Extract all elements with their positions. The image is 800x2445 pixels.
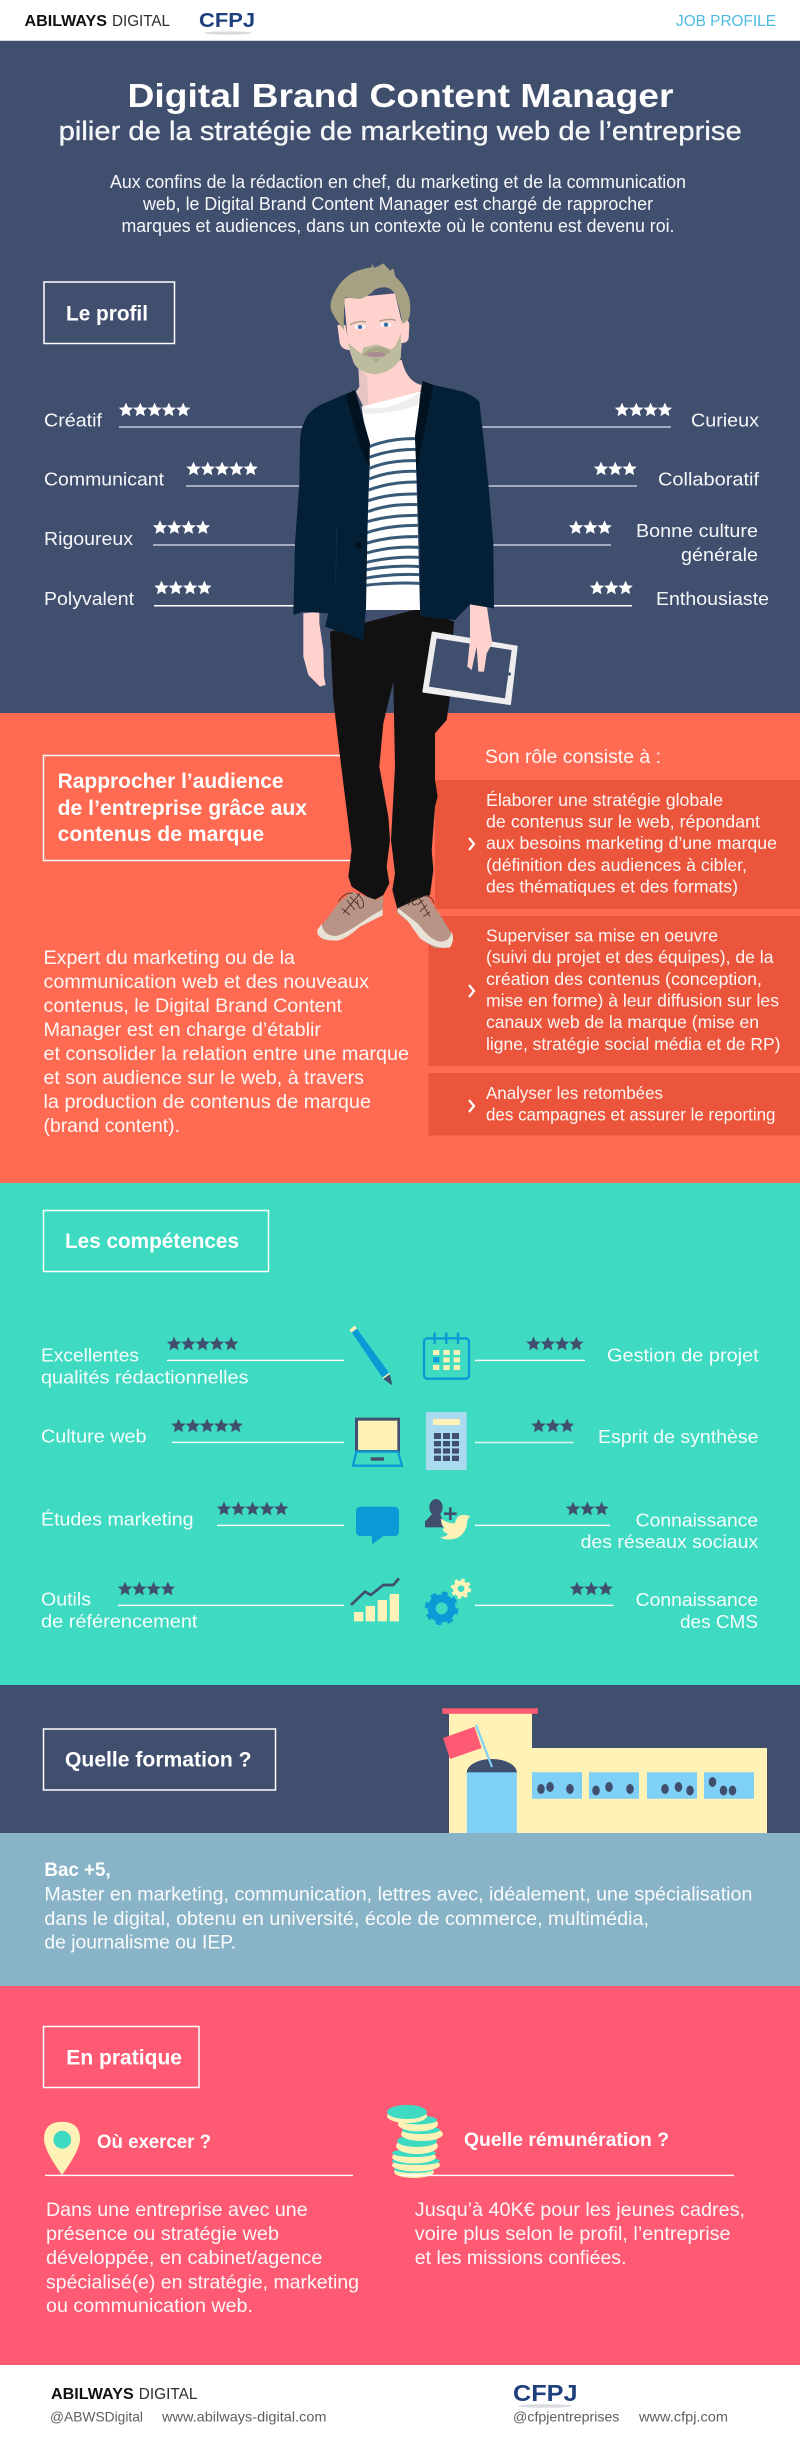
box: élaborer: Élaborer une stratégie globale <box>486 790 723 810</box>
footer: Abilways Digital: www.abilways-digital.com <box>161 2409 326 2425</box>
rating: rigoureux <box>44 520 297 549</box>
text block: où exercer: ou communication web. <box>46 2296 253 2317</box>
text block: rémunération: voire plus selon le profil, l’entreprise <box>415 2224 731 2245</box>
heading: son rôle: Son rôle consiste à : <box>485 747 661 768</box>
tablet <box>423 633 517 704</box>
skill: cms: des CMS <box>680 1611 758 1632</box>
panel: en pratique <box>0 1986 800 2365</box>
skill: esprit de synthèse: Esprit de synthèse <box>598 1426 758 1447</box>
text block: expert: Manager est en charge d’établir <box>44 1020 322 1041</box>
skill: cms: Connaissance <box>636 1589 758 1610</box>
text block: expert: et son audience sur le web, à travers <box>44 1068 364 1089</box>
box: analyser: Analyser les retombées <box>486 1083 663 1103</box>
heading: le profil: Le profil <box>66 302 148 326</box>
logo: Abilways Digital <box>24 13 170 30</box>
box: superviser: canaux web de la marque (mise en <box>486 1012 759 1032</box>
intro text: marques et audiences, dans un contexte où le contenu est devenu roi. <box>122 215 674 236</box>
box: analyser: des campagnes et assurer le reporting <box>486 1105 776 1125</box>
hands <box>303 603 492 687</box>
logo: CFPJ: CFPJ <box>199 10 255 32</box>
rating: curieux: Curieux <box>691 410 760 431</box>
rating: créatif: Créatif <box>44 410 103 431</box>
rating: créatif <box>44 403 304 431</box>
footer <box>0 2365 800 2445</box>
text block: où exercer: spécialisé(e) en stratégie, marketing <box>46 2272 359 2293</box>
skill: réseaux sociaux <box>475 1502 759 1552</box>
footer: CFPJ: www.cfpj.com <box>638 2409 728 2425</box>
text block: rémunération <box>415 2200 745 2269</box>
heading: les compétences: Les compétences <box>65 1230 239 1253</box>
icon: pencil <box>349 1326 392 1385</box>
heading: en pratique: En pratique <box>66 2046 182 2069</box>
skill: qualités rédactionnelles: Excellentes <box>41 1345 139 1366</box>
head <box>331 263 410 374</box>
illustration: school building <box>442 1708 767 1833</box>
heading: rapprocher l'audience: de l’entreprise grâce aux <box>58 797 307 820</box>
footer: CFPJ <box>513 2380 728 2425</box>
text block: expert <box>44 948 409 1137</box>
rating: bonne culture générale: Bonne culture <box>636 520 758 541</box>
skill: esprit de synthèse <box>475 1419 758 1447</box>
icon: laptop <box>353 1418 402 1466</box>
rating: collaboratif <box>486 462 760 490</box>
text block: expert: la production de contenus de marque <box>44 1092 371 1113</box>
rating: polyvalent <box>44 581 296 609</box>
skill: outils de référencement <box>41 1582 344 1632</box>
icon: trend chart <box>351 1578 399 1621</box>
box: superviser: Superviser sa mise en oeuvre <box>486 926 718 946</box>
rating: curieux <box>480 403 760 431</box>
panel: quelle formation <box>0 1685 800 1833</box>
box: élaborer: aux besoins marketing d’une marque <box>486 833 777 853</box>
rating: enthousiaste <box>492 581 769 609</box>
box: élaborer: de contenus sur le web, répondant <box>486 812 760 832</box>
skill: qualités rédactionnelles: qualités rédactionnelles <box>41 1367 248 1388</box>
text block: expert: contenus, le Digital Brand Content <box>44 996 343 1017</box>
rating: rigoureux: Rigoureux <box>44 528 134 549</box>
text block: expert: communication web et des nouveaux <box>44 972 370 993</box>
heading: quelle formation <box>44 1729 276 1790</box>
rating: communicant <box>44 462 302 490</box>
footer: Abilways Digital: @ABWSDigital <box>50 2409 143 2425</box>
text block: où exercer: présence ou stratégie web <box>46 2224 279 2245</box>
right shoe <box>397 895 453 948</box>
rating: communicant: Communicant <box>44 469 164 490</box>
text block: expert: et consolider la relation entre une marque <box>44 1044 409 1065</box>
box: élaborer <box>435 780 800 909</box>
icon: map pin <box>44 2122 80 2175</box>
heading: rapprocher l'audience: Rapprocher l’audience <box>58 770 284 793</box>
heading: le profil <box>44 282 174 344</box>
skill: culture web: Culture web <box>41 1426 146 1447</box>
subheading: quelle rémunération: Quelle rémunération ? <box>464 2130 669 2151</box>
skill: culture web <box>41 1419 344 1447</box>
heading: rapprocher l'audience: contenus de marque <box>58 823 264 846</box>
text block: rémunération: et les missions confiées. <box>415 2248 626 2269</box>
skill: études marketing <box>41 1502 344 1530</box>
panel: profil <box>0 41 800 713</box>
text block: expert: (brand content). <box>44 1116 180 1137</box>
skill: gestion de projet <box>475 1337 759 1366</box>
text block: où exercer <box>46 2200 359 2317</box>
footer: Abilways Digital <box>50 2386 326 2425</box>
rating: collaboratif: Collaboratif <box>658 469 760 490</box>
skill: réseaux sociaux: des réseaux sociaux <box>581 1531 759 1552</box>
box: superviser: ligne, stratégie social média et de RP) <box>486 1034 780 1054</box>
heading: rapprocher l'audience <box>44 756 360 860</box>
panel: bac +5: de journalisme ou IEP. <box>44 1933 236 1954</box>
text block: rémunération: Jusqu’à 40K€ pour les jeunes cadres, <box>415 2200 745 2221</box>
panel: bac +5 <box>0 1833 800 1986</box>
skill: outils de référencement: Outils <box>41 1589 91 1610</box>
text block: expert: Expert du marketing ou de la <box>44 948 295 969</box>
footer: CFPJ: CFPJ <box>513 2380 578 2406</box>
striped shirt <box>362 392 421 610</box>
subheading: où exercer: Où exercer ? <box>97 2132 211 2153</box>
heading: quelle formation: Quelle formation ? <box>65 1749 252 1772</box>
skill: études marketing: Études marketing <box>41 1509 194 1530</box>
skill: réseaux sociaux: Connaissance <box>636 1510 758 1531</box>
box: élaborer: des thématiques et des formats) <box>486 877 738 897</box>
rating: polyvalent: Polyvalent <box>44 588 134 609</box>
panel: bac +5: Bac +5, <box>44 1860 111 1881</box>
skill: cms <box>475 1582 758 1632</box>
pants <box>330 608 454 909</box>
intro text <box>110 171 686 236</box>
jacket <box>293 381 494 640</box>
footer: Abilways Digital: ABILWAYS <box>51 2386 134 2403</box>
box: élaborer: (définition des audiences à cibler, <box>486 855 747 875</box>
heading: les compétences <box>44 1210 268 1272</box>
heading: en pratique <box>44 2026 199 2088</box>
intro text: Aux confins de la rédaction en chef, du marketing et de la communication <box>110 171 686 192</box>
panel: compétences <box>0 1183 800 1685</box>
left shoe <box>317 892 383 941</box>
neck <box>337 319 422 407</box>
icon: calculator <box>426 1412 467 1470</box>
panel: bac +5: Master en marketing, communication, lettres avec, idéalement, une spécialisation <box>44 1885 752 1906</box>
icon: gears <box>427 1580 470 1623</box>
logo: Abilways Digital: ABILWAYS <box>24 13 107 30</box>
rating: enthousiaste: Enthousiaste <box>656 588 769 609</box>
box: superviser: mise en forme) à leur diffusion sur les <box>486 991 779 1011</box>
text block: où exercer: développée, en cabinet/agence <box>46 2248 322 2269</box>
skill: outils de référencement: de référencement <box>41 1611 198 1632</box>
icon: calendar <box>424 1333 469 1379</box>
logo: Abilways Digital: DIGITAL <box>112 13 170 30</box>
box: superviser <box>428 916 800 1066</box>
icon: speech bubble <box>356 1507 399 1544</box>
icons: compétences <box>349 1326 470 1623</box>
panel: bac +5: dans le digital, obtenu en université, école de commerce, multimédia, <box>44 1909 649 1930</box>
footer: Abilways Digital: DIGITAL <box>139 2386 197 2403</box>
icon: user and twitter bird <box>425 1499 470 1539</box>
text block: où exercer: Dans une entreprise avec une <box>46 2200 308 2221</box>
skill: gestion de projet: Gestion de projet <box>607 1345 759 1366</box>
box: superviser: création des contenus (conception, <box>486 969 762 989</box>
footer: CFPJ: @cfpjentreprises <box>513 2409 619 2425</box>
panel: rôle <box>0 713 800 1183</box>
skill: qualités rédactionnelles <box>41 1337 344 1388</box>
rating: bonne culture générale: générale <box>681 544 758 565</box>
subtitle: pilier de la stratégie de marketing web de l’entreprise <box>59 116 742 146</box>
rating: bonne culture générale <box>491 520 758 565</box>
label: job profile: JOB PROFILE <box>676 13 776 30</box>
header bar <box>0 0 800 42</box>
icon: coin stack <box>387 2105 443 2178</box>
title: Digital Brand Content Manager <box>128 77 674 114</box>
box: analyser <box>428 1073 800 1136</box>
illustration: man with tablet <box>293 263 517 948</box>
box: superviser: (suivi du projet et des équipes), de la <box>486 947 774 967</box>
intro text: web, le Digital Brand Content Manager est chargé de rapprocher <box>142 193 653 214</box>
